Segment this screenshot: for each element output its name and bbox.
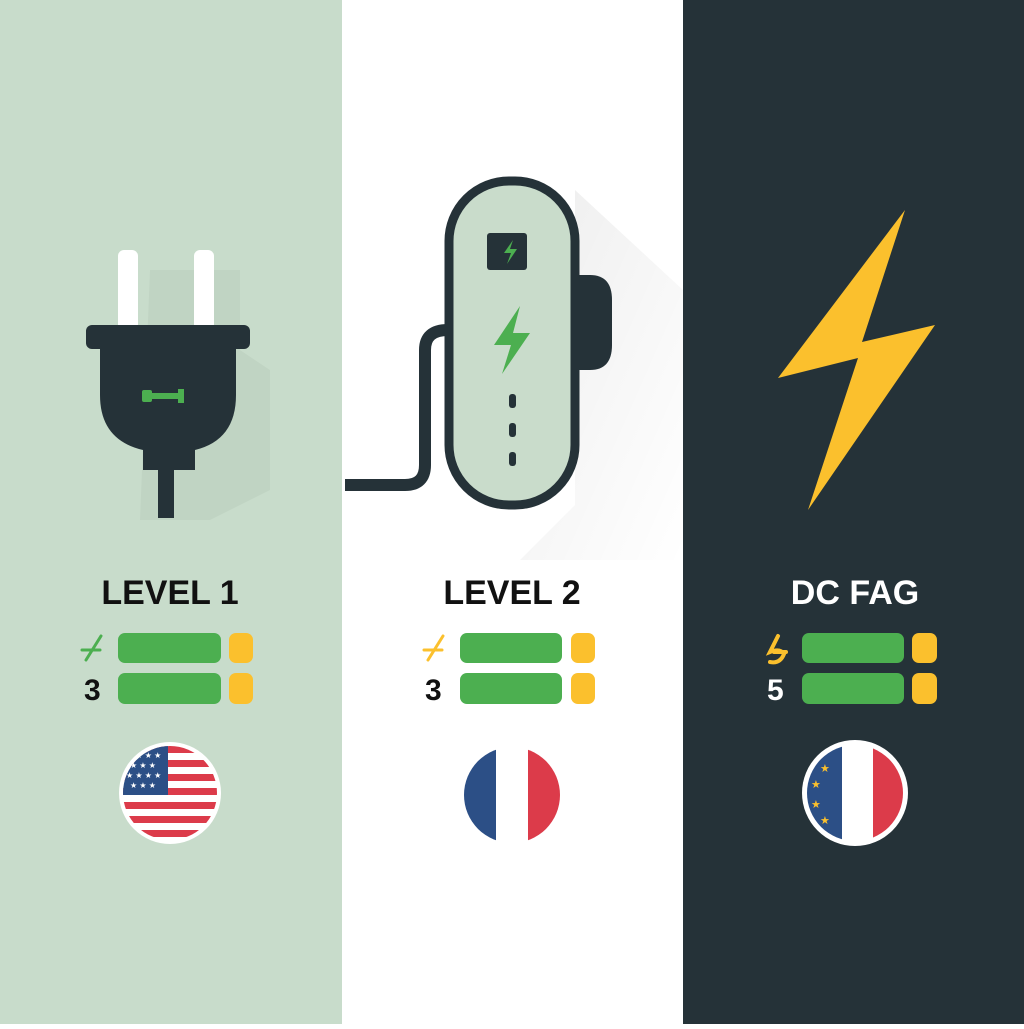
flag: USA: ★ ★ ★ bbox=[130, 761, 156, 770]
bars: DC bbox=[767, 633, 937, 707]
bars: level 1: 3 bbox=[84, 674, 101, 707]
bars: DC: 5 bbox=[767, 674, 784, 707]
icon: charger bbox=[345, 181, 612, 505]
icon: lightning bbox=[778, 210, 935, 510]
bars: level 1 bbox=[82, 633, 253, 707]
bars: level 2: 3 bbox=[425, 674, 442, 707]
bars: level 2 bbox=[424, 633, 595, 707]
flag: USA bbox=[119, 742, 221, 845]
panel: level 2 bbox=[345, 176, 657, 840]
flag: France bbox=[464, 750, 560, 840]
panel: DC fast bbox=[683, 0, 1024, 1024]
flag: USA: ★ ★ ★ ★ bbox=[126, 751, 161, 760]
heading: LEVEL 2: LEVEL 2 bbox=[443, 574, 581, 612]
flag: France/EU bbox=[802, 740, 913, 846]
flag: USA: ★ ★ ★ bbox=[130, 781, 156, 790]
heading: DC FAG: DC FAG bbox=[791, 574, 919, 612]
flag: France/EU: ★ bbox=[820, 815, 830, 827]
flag: USA: ★ ★ ★ ★ bbox=[126, 771, 161, 780]
flag: France/EU: ★ bbox=[820, 763, 830, 775]
icon: plug bbox=[86, 250, 270, 520]
panel: level 1 bbox=[0, 0, 342, 1024]
flag: France/EU: ★ bbox=[811, 779, 821, 791]
flag: France/EU: ★ bbox=[811, 799, 821, 811]
heading: LEVEL 1: LEVEL 1 bbox=[101, 574, 239, 612]
